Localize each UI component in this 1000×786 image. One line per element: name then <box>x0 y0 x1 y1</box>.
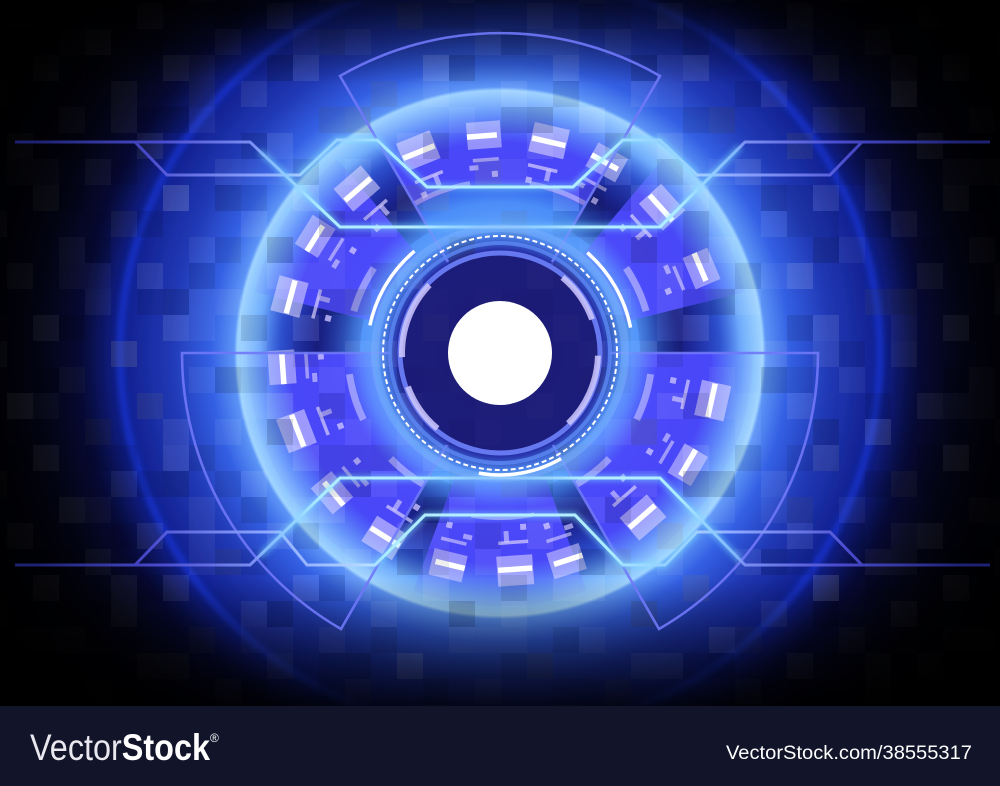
lavender ring arcs <box>362 215 638 491</box>
circuit glow <box>260 140 740 565</box>
footer image id: VectorStock.com/38555317 <box>726 743 972 764</box>
right wireframe sector <box>553 353 818 629</box>
glowing HUD band <box>206 59 794 647</box>
top wireframe sector <box>340 33 660 262</box>
footer logo: VectorStock <box>30 727 210 768</box>
wireframe sectors <box>182 33 818 629</box>
footer registered mark: ® <box>210 731 219 745</box>
central white circle <box>448 301 552 405</box>
concentric rings <box>375 228 625 478</box>
bright white arcs <box>312 165 688 541</box>
translucent sectors <box>206 59 794 647</box>
left wireframe sector <box>182 353 447 629</box>
inner dark disc <box>402 255 598 451</box>
footer bar <box>0 706 1000 786</box>
sector arc accents <box>265 118 735 588</box>
core halo <box>372 225 628 481</box>
data tick clusters <box>267 120 731 587</box>
upper stepped trace <box>135 140 862 187</box>
core rings <box>312 165 688 541</box>
circuit lines <box>15 140 990 565</box>
lower long trace <box>15 478 990 565</box>
lower stepped trace <box>135 515 862 565</box>
outer halo ring <box>118 0 882 735</box>
upper long trace <box>15 142 990 227</box>
dark gaps between sectors <box>232 85 768 621</box>
